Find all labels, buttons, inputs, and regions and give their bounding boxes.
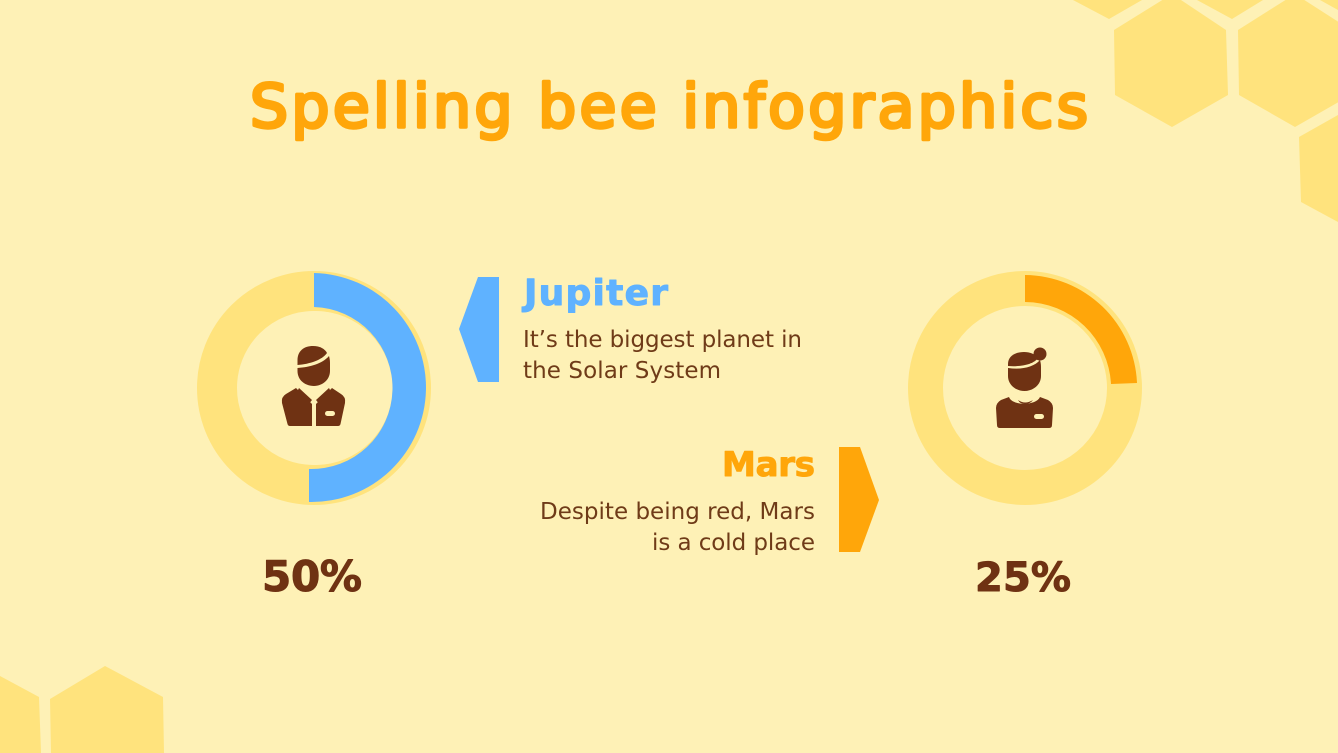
text block: Jupiter description: It’s the biggest planet in bbox=[523, 327, 802, 353]
text block: Mars description bbox=[540, 499, 815, 556]
heading: Jupiter: Jupiter bbox=[521, 273, 668, 314]
title: Spelling bee infographics bbox=[250, 72, 1088, 142]
text block: Mars description: Despite being red, Mars bbox=[540, 499, 815, 525]
text block: Jupiter description: the Solar System bbox=[523, 358, 721, 384]
honeycomb: bottom left bbox=[0, 666, 164, 753]
text block: Mars description: is a cold place bbox=[652, 530, 815, 556]
heading: Mars: Mars bbox=[722, 445, 815, 485]
icon: man in uniform bbox=[282, 346, 345, 426]
icon: woman in uniform bbox=[996, 348, 1053, 428]
arrow: blue, pointing left bbox=[459, 277, 499, 382]
donut chart: 25% bbox=[926, 275, 1137, 488]
arrow: orange, pointing right bbox=[839, 447, 879, 552]
text block: Jupiter description bbox=[523, 327, 802, 384]
donut chart: 50% bbox=[217, 273, 426, 502]
honeycomb: top right bbox=[1073, 0, 1338, 234]
value: 25%: 25% bbox=[975, 555, 1071, 601]
value: 50%: 50% bbox=[262, 552, 362, 601]
